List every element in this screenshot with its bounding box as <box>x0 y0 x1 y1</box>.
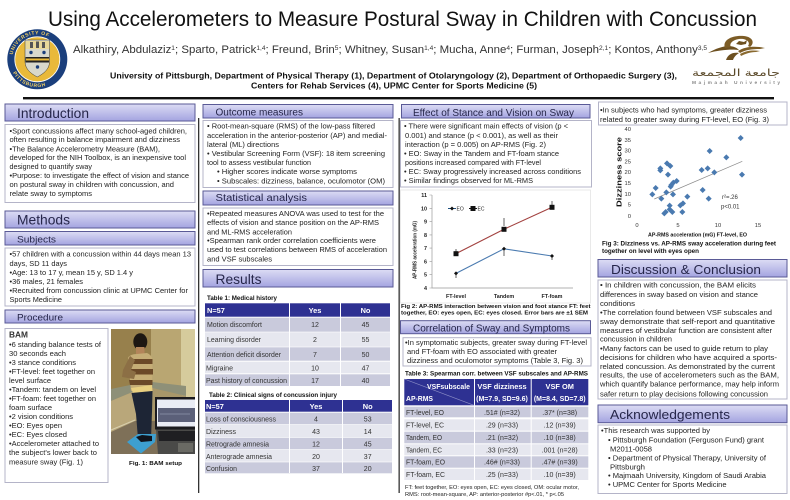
heading: Acknowledgements <box>598 405 787 423</box>
panel: outcome measures <box>203 104 393 188</box>
text: discussion body: •Many factors can be used to guide return to play <box>600 344 768 353</box>
line chart: AP-RMS by stance and vision: 7 <box>424 246 427 252</box>
table 3: Spearman correlations: .29 (n=33) <box>486 422 518 430</box>
text: outcome measures body: acceleration in the anterior-posterior (AP) and medial- <box>207 131 388 140</box>
table 2: clinical signs: Loss of consciousness <box>206 416 276 424</box>
heading: Methods <box>5 211 195 228</box>
line chart: AP-RMS by stance and vision: 4 <box>424 286 427 292</box>
text: BAM procedure: the subject's lower back to <box>9 448 97 457</box>
table 2: clinical signs: Yes <box>310 402 322 411</box>
text: acknowledgements body: M2011-0058 <box>610 444 652 454</box>
text: BAM procedure: measure sway (Fig. 1) <box>9 458 83 466</box>
text: discussion body: • In children with concussion, the BAM elicits <box>600 280 756 290</box>
table 2: clinical signs: Dizziness <box>206 429 236 436</box>
heading: Discussion & Conclusion <box>598 260 787 277</box>
text: subjects body <box>5 248 195 306</box>
table 1: medical history: 10 <box>311 366 319 372</box>
line chart: AP-RMS by stance and vision: FT-level <box>446 294 467 300</box>
table 2: clinical signs: 4 <box>314 416 318 424</box>
text: subjects body: Sports Medicine <box>10 295 62 304</box>
text: BAM procedure: •6 standing balance tests of <box>9 340 102 349</box>
table 2: clinical signs: 45 <box>364 442 372 448</box>
table 2: clinical signs: No <box>363 402 373 411</box>
text: effect body: interaction (p = 0.005) on AP-RMS (Fig. 2) <box>405 140 546 149</box>
table 3: Spearman correlations: .10 (n=39) <box>544 472 576 479</box>
scatter plot: dizziness vs AP-RMS: Dizziness score <box>614 137 624 207</box>
scatter plot: dizziness vs AP-RMS: r²=.26 <box>722 195 739 201</box>
table 3: Spearman correlations: (M=8.4, SD=7.8) <box>534 396 586 403</box>
table 3: Spearman correlations: .10 (n=38) <box>544 435 576 442</box>
table 2: clinical signs: Anterograde amnesia <box>206 454 272 461</box>
text: effect body: • EO: Sway in the Tandem and FT-foam stance <box>404 149 559 158</box>
authors: 1,4 <box>424 45 434 52</box>
scatter plot: dizziness vs AP-RMS: 0 <box>635 223 639 229</box>
panel: acknowledgements <box>598 405 787 494</box>
affiliations: University of Pittsburgh, Department of Physical Therapy (1), Department of Otolaryngology (2), Department of Orthopaedic Surgery (3), <box>110 71 677 80</box>
text: discussion body: •The correlation found between VSF subscales and <box>600 308 772 317</box>
table 1: medical history <box>205 303 390 386</box>
text: outcome measures body: • Subscales: dizziness, balance, oculomotor (OM) <box>217 176 385 186</box>
logo: Majmaah University: جامعة المجمعة <box>692 68 780 79</box>
text: introduction body: relate sway to symptoms <box>10 189 92 198</box>
text: discussion body: related concussion. As demonstrated by the current <box>600 362 775 371</box>
text: discussion body <box>598 280 787 399</box>
text: statistical analysis body: and VSF subscales <box>207 254 272 264</box>
title: Using Accelerometers to Measure Postural Sway in Children with Concussion <box>48 8 757 31</box>
scatter plot: dizziness vs AP-RMS <box>614 127 761 238</box>
scatter plot: dizziness vs AP-RMS: 35 <box>625 138 631 144</box>
table 1: medical history: Past history of concussion <box>206 378 287 385</box>
line chart: AP-RMS by stance and vision: EC <box>478 206 485 212</box>
line chart: AP-RMS by stance and vision: Tandem <box>494 294 514 300</box>
footnote: table 3 abbreviations: RMS: root-mean-square, AP: anterior-posterior #p<.01, * p<.05 <box>405 492 564 498</box>
table 3: Spearman correlations: Tandem, EO <box>406 435 442 442</box>
table 3: Spearman correlations: Tandem, EC <box>406 448 442 454</box>
affiliations: Centers for Rehab Services (4), UPMC Center for Sports Medicine (5) <box>251 81 537 90</box>
authors: ; Furman, Joseph <box>510 44 599 56</box>
text: symptoms finding: •In subjects who had symptoms, greater dizziness <box>600 106 767 114</box>
table 2: clinical signs: 37 <box>312 466 320 473</box>
wall rail <box>111 382 186 401</box>
text: introduction body <box>5 124 195 202</box>
table 3: Spearman correlations: .33 (n=23) <box>486 448 518 454</box>
table 3: Spearman correlations: .25 (n=33) <box>486 472 518 479</box>
table 1: medical history: 2 <box>313 337 317 344</box>
line chart: AP-RMS by stance and vision: 6 <box>424 259 427 265</box>
panel: statistical analysis <box>203 191 393 266</box>
text: effect body <box>400 120 592 187</box>
table 1: medical history: 45 <box>362 322 369 329</box>
table 3: Spearman correlations: .001 (n=28) <box>542 448 578 454</box>
table 3: Spearman correlations: FT-level, EC <box>406 422 444 430</box>
text: BAM procedure: BAM <box>9 330 28 340</box>
table 1: medical history: 7 <box>313 352 317 359</box>
line chart: AP-RMS by stance and vision: FT-foam <box>542 294 563 300</box>
table 3: Spearman correlations: FT-level, EO <box>406 410 445 417</box>
text: introduction body: on postural sway in children with concussion, and <box>10 180 174 189</box>
heading: Procedure <box>5 310 195 323</box>
line chart: AP-RMS by stance and vision: EO <box>456 206 464 212</box>
table 2: clinical signs: 12 <box>312 442 320 448</box>
text: acknowledgements body: • Department of Physical Therapy, University of <box>608 454 767 462</box>
scatter plot: dizziness vs AP-RMS: 0 <box>628 214 631 220</box>
table 1: medical history: 17 <box>311 378 319 385</box>
table 2: clinical signs <box>205 400 392 473</box>
scatter plot: dizziness vs AP-RMS: 10 <box>715 223 721 229</box>
table 1: medical history: N=57 <box>207 306 225 315</box>
line chart: AP-RMS by stance and vision <box>400 190 590 303</box>
caption: table 2: Table 2: Clinical signs of concussion injury <box>209 392 338 399</box>
footnote: table 3 abbreviations <box>405 485 579 498</box>
authors: ; Kontos, Anthony <box>608 44 698 56</box>
table 2: clinical signs: 20 <box>312 454 320 461</box>
scatter plot: dizziness vs AP-RMS: p<0.01 <box>721 204 740 210</box>
text: subjects body: •Recruited from concussion clinic at UPMC Center for <box>10 286 189 295</box>
text: outcome measures body: • Higher scores indicate worse symptoms <box>217 167 357 176</box>
table 3: Spearman correlations: .12 (n=39) <box>544 422 576 430</box>
authors: Alkathiry, Abdulaziz <box>73 44 170 56</box>
table 3: Spearman correlations: .47# (n=39) <box>542 460 578 466</box>
panel: symptoms and dizziness <box>598 102 787 255</box>
panel: effect of stance and vision <box>400 104 592 316</box>
scatter plot: dizziness vs AP-RMS: 15 <box>625 181 631 187</box>
table 3: Spearman correlations: .37* (n=38) <box>542 410 577 417</box>
logo: University of Pittsburgh seal: PITTSBURGH <box>13 71 46 88</box>
heading: Acknowledgements: Acknowledgements <box>610 407 731 422</box>
scatter plot: dizziness vs AP-RMS: 20 <box>625 170 631 176</box>
authors: 2,1 <box>599 45 609 52</box>
table 1: medical history: Learning disorder <box>207 337 262 344</box>
text: effect body: • Similar findings observed for ML-RMS <box>404 176 533 185</box>
scatter plot: dizziness vs AP-RMS: 25 <box>625 159 631 165</box>
heading: Outcome measures: Outcome measures <box>216 108 303 118</box>
line chart: AP-RMS by stance and vision: 9 <box>424 220 427 226</box>
heading: Methods: Methods <box>17 212 70 228</box>
caption: table 1: Table 1: Medical history <box>207 296 278 302</box>
caption: figure 2: Fig 2: AP-RMS interaction between vision and foot stance FT: feet <box>401 304 591 310</box>
authors: 1,4 <box>256 45 266 52</box>
heading: Results: Results <box>216 271 262 287</box>
heading: Discussion & Conclusion: Discussion & Conclusion <box>611 262 761 277</box>
panel: methods <box>5 211 195 482</box>
text: introduction body: developed for the NIH Toolbox, is an inexpensive tool <box>10 153 186 162</box>
text: symptoms finding <box>598 102 787 125</box>
text: discussion body: differences in sway based on vision and stance <box>600 290 758 299</box>
table 2: clinical signs: 37 <box>364 454 372 461</box>
heading: Statistical analysis: Statistical analysis <box>216 193 307 204</box>
table 1: medical history: No <box>361 306 371 315</box>
authors: ; Sparto, Patrick <box>175 44 257 56</box>
heading: Introduction: Introduction <box>17 105 89 121</box>
heading: Outcome measures <box>203 104 393 118</box>
caption: figure 3 <box>602 241 776 255</box>
table 3: Spearman correlations: .46# (n=33) <box>484 460 520 466</box>
text: outcome measures body: • Vestibular Screening Form (VSF): 18 item screening <box>207 149 385 158</box>
scatter plot: dizziness vs AP-RMS: 40 <box>625 127 631 133</box>
panel: introduction <box>5 104 195 202</box>
text: outcome measures body: • Root-mean-square (RMS) of the low-pass filtered <box>207 122 375 130</box>
text: discussion body: results, the use of accelerometers such as the BAM, <box>600 370 779 380</box>
table 1: medical history: Migraine <box>206 365 233 372</box>
caption: figure 2: together, EO: eyes open, EC: eyes closed. Error bars are ±1 SEM <box>401 310 588 316</box>
text: discussion body: conditions <box>600 299 635 308</box>
text: BAM procedure: 30 seconds each <box>9 349 66 358</box>
text: BAM procedure: •EO: Eyes open <box>9 421 62 430</box>
text: BAM procedure: •3 stance conditions <box>9 358 76 367</box>
table 3: Spearman correlations: AP-RMS <box>406 394 433 403</box>
text: BAM procedure <box>5 328 108 482</box>
footnote: table 3 abbreviations: FT: feet together, EO: eyes open, EC: eyes closed, OM: ocular motor, <box>405 485 579 491</box>
authors: ; Mucha, Anne <box>433 44 506 56</box>
laptop <box>155 397 195 430</box>
text: introduction body: •The Balance Accelerometry Measure (BAM), <box>10 144 160 153</box>
line chart: AP-RMS by stance and vision: AP-RMS acceleration (mG) <box>412 221 418 279</box>
table 3: Spearman correlations: VSF OM <box>546 382 574 391</box>
text: subjects body: •Age: 13 to 17 y, mean 15 y, SD 1.4 y <box>10 268 133 277</box>
line chart: AP-RMS by stance and vision: 10 <box>421 206 427 212</box>
table 3: Spearman correlations: FT-foam, EO <box>406 460 446 466</box>
text: discussion body: concussion in children <box>600 334 672 344</box>
authors: 3,5 <box>698 45 707 52</box>
text: acknowledgements body: • Pittsburgh Foundation (Ferguson Fund) grant <box>608 436 764 444</box>
heading: Effect of Stance and Vision on Sway: Effect of Stance and Vision on Sway <box>413 107 575 119</box>
text: BAM procedure: •EC: Eyes closed <box>9 430 67 439</box>
caption: table 3: Table 3: Spearman corr. between VSF subscales and AP-RMS <box>405 370 588 377</box>
logo: Majmaah University <box>692 36 780 86</box>
table 1: medical history: 12 <box>311 322 319 329</box>
panel: correlation of sway and symptoms <box>400 321 591 498</box>
text: acknowledgements body: •This research was supported by <box>601 426 710 435</box>
text: BAM procedure: •Accelerometer attached to <box>9 439 99 448</box>
scatter plot: dizziness vs AP-RMS: 5 <box>676 223 680 229</box>
line chart: AP-RMS by stance and vision: 11 <box>421 193 427 199</box>
text: effect body: • EC: Sway progressively increased across conditions <box>404 167 581 176</box>
table 1: medical history: Attention deficit disorder <box>207 352 282 359</box>
text: BAM procedure: •FT-foam: feet together on <box>9 394 96 403</box>
text: BAM procedure: •FT-level: feet together on <box>9 367 95 376</box>
text: effect body: 0.001) and stance (p < 0.001), as well as their <box>405 131 559 140</box>
text: correlation body <box>403 338 591 366</box>
text: discussion body: which quantify balance performance, may help inform <box>599 380 779 388</box>
text: statistical analysis body: •Spearman rank order correlation coefficients were <box>207 236 376 245</box>
line chart: AP-RMS by stance and vision: 5 <box>424 273 427 279</box>
table 1: medical history: 40 <box>362 378 369 385</box>
logo: Majmaah University: Majmaah University <box>692 80 780 86</box>
text: subjects body: days, SD 11 days <box>10 259 67 268</box>
text: statistical analysis body <box>203 208 393 266</box>
text: subjects body: •57 children with a concussion within 44 days mean 13 <box>10 250 191 259</box>
text: BAM procedure: level surface <box>9 376 51 385</box>
text: statistical analysis body: used to test correlations between RMS of acceleration <box>207 245 387 254</box>
authors: 5 <box>335 45 339 52</box>
text: discussion body: safer return to play decisions following concussion <box>600 389 768 398</box>
heading: Introduction <box>5 104 195 121</box>
heading: Statistical analysis <box>203 191 393 205</box>
authors: 1 <box>171 45 175 52</box>
text: subjects body: •36 males, 21 females <box>10 277 83 286</box>
panel: discussion and conclusion <box>598 260 787 399</box>
table 1: medical history: 50 <box>362 352 369 359</box>
table 1: medical history: 55 <box>362 337 369 344</box>
heading: Subjects <box>5 232 195 245</box>
text: outcome measures body: tool to assess vestibular function <box>207 158 311 167</box>
table 3: Spearman correlations: .21 (n=32) <box>486 435 518 442</box>
affiliations <box>110 71 677 90</box>
table 1: medical history: Yes <box>309 306 321 315</box>
text: discussion body: sway demonstrate that self-report and quantitative <box>600 317 775 326</box>
text: discussion body: decisions for children who have acquired a sports- <box>600 353 778 362</box>
heading: Procedure: Procedure <box>17 312 63 323</box>
scatter plot: dizziness vs AP-RMS: 5 <box>628 203 631 209</box>
scatter plot: dizziness vs AP-RMS: 30 <box>625 149 631 155</box>
text: statistical analysis body: effects of vision and stance position on the AP-RMS <box>207 218 379 227</box>
panel: results <box>203 270 393 473</box>
text: acknowledgements body: Pittsburgh <box>610 462 645 472</box>
text: BAM procedure: •2 vision conditions <box>9 412 73 421</box>
authors: 4 <box>506 45 510 52</box>
logo: University of Pittsburgh seal <box>7 29 68 90</box>
authors: ; Whitney, Susan <box>338 44 424 56</box>
heading: Results <box>203 270 393 287</box>
text: effect body: • There were significant main effects of vision (p < <box>404 122 568 130</box>
text: BAM procedure: •Tandem: tandem on level <box>9 385 96 394</box>
table 3: Spearman correlations: .51# (n=32) <box>484 410 520 417</box>
figure 1: BAM setup photo <box>111 329 195 454</box>
text: introduction body: often resulting in balance impairment and dizziness <box>10 135 180 144</box>
table 3: Spearman correlations: FT-foam, EC <box>406 472 445 479</box>
text: acknowledgements body: • Majmaah University, Kingdom of Saudi Arabia <box>608 471 767 480</box>
text: statistical analysis body: and ML-RMS acceleration <box>207 228 292 236</box>
table 1: medical history: 47 <box>362 366 369 372</box>
table 3: Spearman correlations: VSF dizziness <box>477 382 527 391</box>
text: outcome measures body <box>203 120 393 188</box>
scatter plot: dizziness vs AP-RMS: 10 <box>625 192 631 198</box>
table 2: clinical signs: 53 <box>364 416 372 424</box>
text: statistical analysis body: •Repeated measures ANOVA was used to test for the <box>207 209 384 218</box>
caption: figure 2 <box>401 304 591 316</box>
scatter plot: dizziness vs AP-RMS: AP-RMS acceleration (mG) FT-level, EO <box>648 232 747 238</box>
text: correlation body: •In symptomatic subjects, greater sway during FT-level <box>405 338 587 347</box>
scatter plot: dizziness vs AP-RMS: 15 <box>755 223 761 229</box>
table 2: clinical signs: 43 <box>312 429 320 436</box>
text: BAM procedure: foam surface <box>9 403 52 412</box>
text: correlation body: dizziness and oculomotor symptoms (Table 3, Fig. 3) <box>407 356 583 365</box>
heading: Subjects: Subjects <box>17 234 56 245</box>
logo: University of Pittsburgh seal: UNIVERSITY OF <box>9 30 50 54</box>
table 2: clinical signs: Retrograde amnesia <box>206 442 269 448</box>
text: introduction body: •Purpose: to investigate the effect of vision and stance <box>10 171 189 180</box>
text: acknowledgements body: • UPMC Center for Sports Medicine <box>608 480 726 489</box>
line chart: AP-RMS by stance and vision: 8 <box>424 233 427 239</box>
table 2: clinical signs: N=57 <box>206 402 224 411</box>
caption: figure 3: Fig 3: Dizziness vs. AP-RMS sway acceleration during feet <box>602 241 776 247</box>
text: acknowledgements body <box>598 425 787 494</box>
text: introduction body: designed to quantify sway <box>10 162 92 171</box>
caption: figure 3: together on level with eyes open <box>602 249 699 255</box>
text: correlation body: and FT-foam with EO associated with greater <box>407 347 558 356</box>
caption: figure 1: Fig. 1: BAM setup <box>129 461 182 467</box>
table 2: clinical signs: Confusion <box>206 466 237 473</box>
table 3: Spearman correlations: (M=7.9, SD=9.6) <box>476 396 528 403</box>
table 2: clinical signs: 20 <box>364 466 372 473</box>
table 3: Spearman correlations <box>404 379 588 480</box>
heading: Correlation of Sway and Symptoms: Correlation of Sway and Symptoms <box>413 322 570 334</box>
person <box>133 333 147 350</box>
text: discussion body: measures of vestibular function are consistent after <box>600 326 773 335</box>
table 1: medical history: Motion discomfort <box>207 322 262 329</box>
text: effect body: positions increased compared with FT-level <box>405 158 541 167</box>
authors: ; Freund, Brin <box>266 44 335 56</box>
table 3: Spearman correlations: VSFsubscale <box>427 382 470 391</box>
text: introduction body: •Sport concussions affect many school-aged children, <box>10 126 187 135</box>
text: outcome measures body: lateral (ML) directions <box>207 140 279 149</box>
text: symptoms finding: related to greater sway during FT-level, EO (Fig. 3) <box>600 115 769 124</box>
table 2: clinical signs: 14 <box>364 429 372 436</box>
